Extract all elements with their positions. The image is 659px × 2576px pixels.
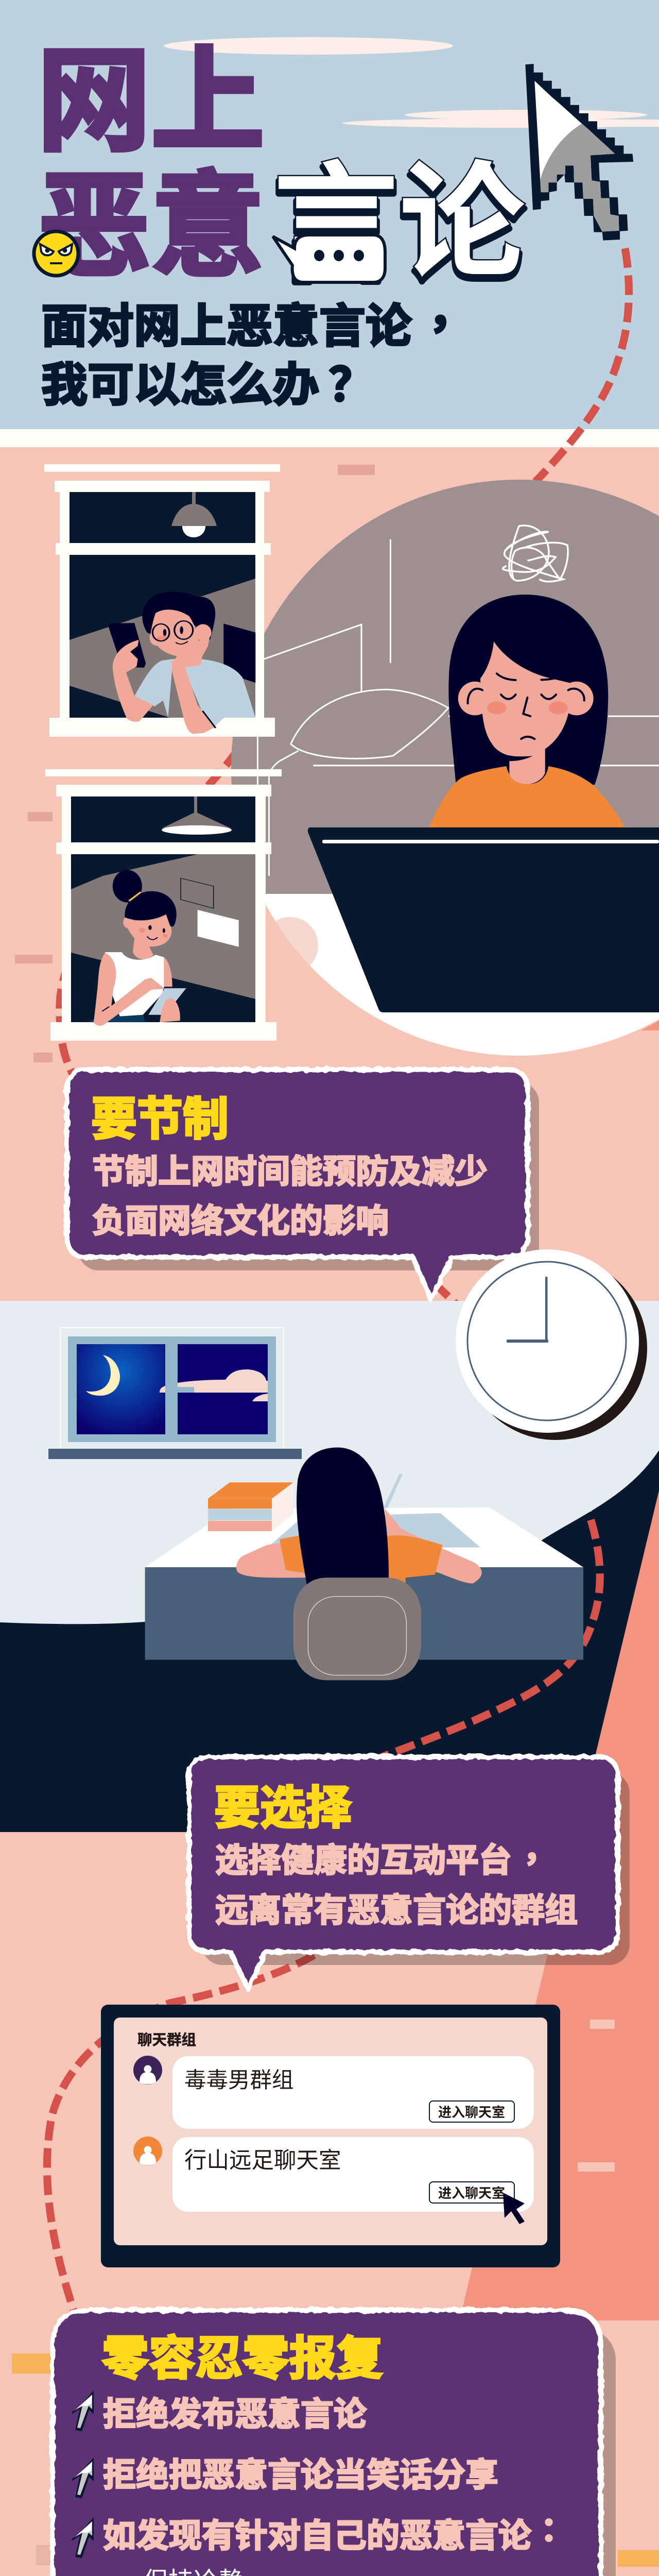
subtitle bbox=[41, 285, 474, 411]
body text: ， bbox=[523, 1831, 556, 1868]
room dome: bedroom background bbox=[227, 477, 659, 1064]
window 1 with man bbox=[44, 464, 280, 737]
background: blue header bbox=[0, 0, 659, 429]
row: group 1 bbox=[133, 2056, 534, 2129]
icon: scribble bbox=[503, 526, 568, 582]
man figure bbox=[109, 591, 255, 734]
clouds bbox=[164, 37, 659, 128]
panel: speech bubble 要选择 bbox=[189, 1757, 630, 1989]
item 1: 拒绝发布恶意言论 bbox=[103, 2396, 367, 2433]
books bbox=[208, 1482, 293, 1531]
small salmon corner bbox=[641, 1021, 659, 1030]
icon: angry face bbox=[34, 231, 78, 276]
room wedge bbox=[71, 854, 255, 999]
tablet title: 聊天群组 bbox=[137, 2032, 196, 2048]
body text: 负面网络文化的影响 bbox=[92, 1202, 389, 1240]
item 2: 拒绝把恶意言论当笑话分享 bbox=[103, 2456, 498, 2494]
item 3: ： bbox=[541, 2511, 574, 2548]
window with night sky bbox=[48, 1328, 302, 1459]
row: group 1: 进入聊天室 bbox=[438, 2105, 505, 2120]
room wedge bbox=[70, 579, 255, 718]
cloud bbox=[160, 1369, 268, 1401]
subtitle: 我可以怎么办？ bbox=[41, 360, 375, 411]
icon: wall clock bbox=[456, 1249, 647, 1440]
background: salmon diagonal bbox=[461, 1490, 659, 2320]
row: group 2 bbox=[133, 2137, 534, 2212]
panel: tablet chat groups bbox=[101, 2005, 560, 2267]
item 3: 如发现有针对自己的恶意言论 bbox=[103, 2517, 531, 2554]
lamp bbox=[162, 796, 232, 835]
row: group 1: 毒毒男群组 bbox=[184, 2069, 294, 2093]
woman figure bbox=[88, 870, 239, 1026]
icon: pixel cursor bbox=[525, 64, 633, 243]
moon bbox=[86, 1355, 120, 1396]
heading: 要选择 bbox=[214, 1782, 352, 1834]
chair bbox=[293, 1578, 421, 1680]
title: 言论: 言论 bbox=[273, 152, 525, 293]
window 2 with woman bbox=[45, 769, 282, 1041]
background: navy floor bbox=[0, 1391, 659, 1832]
row: group 2: 进入聊天室 bbox=[438, 2185, 505, 2201]
panel: speech bubble 零容忍零报复 bbox=[53, 2310, 616, 2576]
title: 网上恶意: 网上 bbox=[37, 38, 265, 165]
laptop bbox=[308, 827, 659, 1012]
body text: 节制上网时间能预防及减少 bbox=[92, 1153, 488, 1190]
body text: 远离常有恶意言论的群组 bbox=[215, 1892, 578, 1929]
body text bbox=[92, 1153, 488, 1240]
heading: 零容忍零报复 bbox=[102, 2333, 383, 2385]
subtitle: ， bbox=[427, 285, 474, 337]
background: white band bbox=[0, 429, 659, 447]
title: 言论 shadow: 言论 bbox=[273, 157, 525, 298]
window frame bbox=[49, 481, 275, 737]
title: 网上恶意: 恶意 bbox=[37, 163, 265, 290]
bedroom line art bbox=[257, 539, 659, 876]
desk with books and person bbox=[145, 1448, 583, 1680]
lamp bbox=[171, 492, 217, 537]
body text bbox=[215, 1831, 578, 1929]
icon: mouse cursor bbox=[503, 2193, 525, 2224]
sill bbox=[48, 1449, 302, 1459]
body text: 选择健康的互动平台 bbox=[215, 1842, 512, 1879]
big woman at laptop bbox=[429, 595, 626, 827]
item 3 bbox=[72, 2511, 574, 2558]
icon: speech bubble in 言 bbox=[273, 235, 385, 282]
bedroom room: pale study wall bbox=[0, 1301, 659, 1624]
panel: speech bubble 要节制 bbox=[67, 1070, 539, 1299]
row: group 2: 行山远足聊天室 bbox=[184, 2148, 341, 2173]
subtitle: 面对网上恶意言论 bbox=[41, 301, 412, 352]
title: 网上恶意 bbox=[37, 38, 265, 290]
heading: 要节制 bbox=[91, 1093, 229, 1145]
window frame bbox=[50, 785, 276, 1041]
